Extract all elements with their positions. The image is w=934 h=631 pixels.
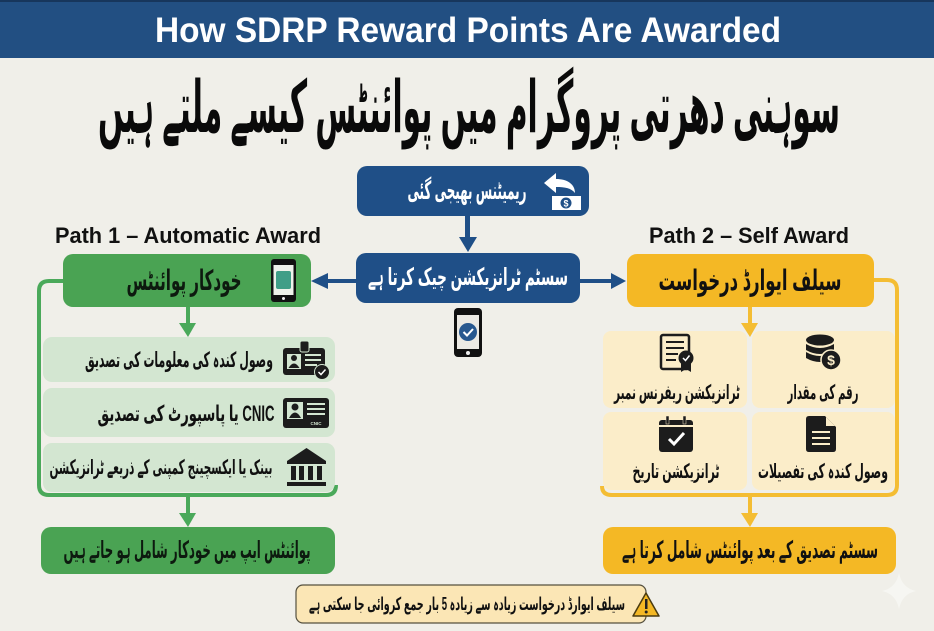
panel: automatic award header — [63, 254, 311, 307]
icon: phone with check — [454, 308, 482, 357]
cell: amount — [752, 331, 895, 408]
cell: amount: رقم کی مقدار — [787, 382, 858, 404]
title band: How SDRP Reward Points Are Awarded — [155, 11, 781, 50]
connector arrows between centre boxes and paths — [311, 216, 626, 289]
icon: calendar check — [659, 416, 693, 452]
icon: money with return arrow: $ — [563, 198, 569, 208]
heading: path 1: Path 1 – Automatic Award — [55, 223, 321, 248]
cell: recipient details — [752, 412, 895, 490]
panel: self award header — [627, 254, 874, 307]
box: remittance sent: ریمیٹنس بھیجی گئی — [408, 176, 526, 206]
arrow: yellow down — [741, 307, 758, 337]
path 1 outline connector — [39, 281, 336, 495]
arrow: yellow down to result — [741, 495, 758, 527]
icon: phone with CNIC app — [271, 259, 296, 302]
row: recipient info verification: وصول کندہ کی معلومات کی تصدیق — [85, 349, 273, 372]
row: CNIC or passport verification — [43, 388, 335, 437]
row: transaction through bank or exchange company — [43, 443, 335, 492]
callout: submission limit warning — [296, 585, 659, 623]
panel: automatic checks — [43, 337, 335, 492]
cell: transaction reference number — [603, 331, 747, 408]
icon: CNIC card — [283, 398, 329, 428]
path 2 outline connector — [602, 280, 897, 495]
icon: money with return arrow — [544, 173, 581, 210]
heading: path 2: Path 2 – Self Award — [649, 223, 849, 248]
icon: coins — [806, 334, 841, 370]
panel: self award details — [603, 331, 895, 490]
arrow: green down — [179, 307, 196, 337]
box: system checks transaction: سسٹم ٹرانزیکشن چیک کرتا ہے — [368, 264, 568, 291]
cell: transaction reference number: ٹرانزیکشن ریفرنس نمبر — [613, 382, 740, 404]
result: points added automatically — [41, 527, 335, 574]
arrow: green down to result — [179, 495, 196, 527]
row: recipient info verification — [43, 337, 335, 382]
icon: coins: $ — [827, 352, 835, 368]
row: CNIC or passport verification: CNIC یا پاسپورٹ کی تصدیق — [97, 401, 275, 427]
icon: certificate document — [661, 335, 694, 372]
cell: transaction date — [603, 412, 747, 490]
box: remittance sent — [357, 166, 589, 216]
icon: document — [806, 416, 836, 452]
icon: bank — [287, 448, 326, 486]
icon: warning triangle — [633, 593, 659, 616]
sparkle mark — [882, 573, 916, 609]
row: transaction through bank or exchange company: بینک یا ایکسچینج کمپنی کے ذریعے ٹرانزیکشن — [50, 457, 272, 480]
icon: ID badge with check — [283, 341, 330, 380]
box: system checks transaction — [356, 253, 580, 303]
icon: CNIC card: CNIC — [310, 421, 322, 426]
callout: submission limit warning: سیلف ایوارڈ درخواست زیادہ سے زیادہ 5 بار جمع کروائی جا سکتی ہے — [309, 594, 625, 615]
panel: automatic award header: خودکار پوائنٹس — [126, 265, 242, 297]
cell: transaction date: ٹرانزیکشن تاریخ — [632, 461, 720, 483]
result: system adds points after verification — [603, 527, 896, 574]
title band — [0, 0, 934, 58]
result: points added automatically: پوائنٹس ایپ میں خودکار شامل ہو جاتے ہیں — [64, 537, 310, 564]
